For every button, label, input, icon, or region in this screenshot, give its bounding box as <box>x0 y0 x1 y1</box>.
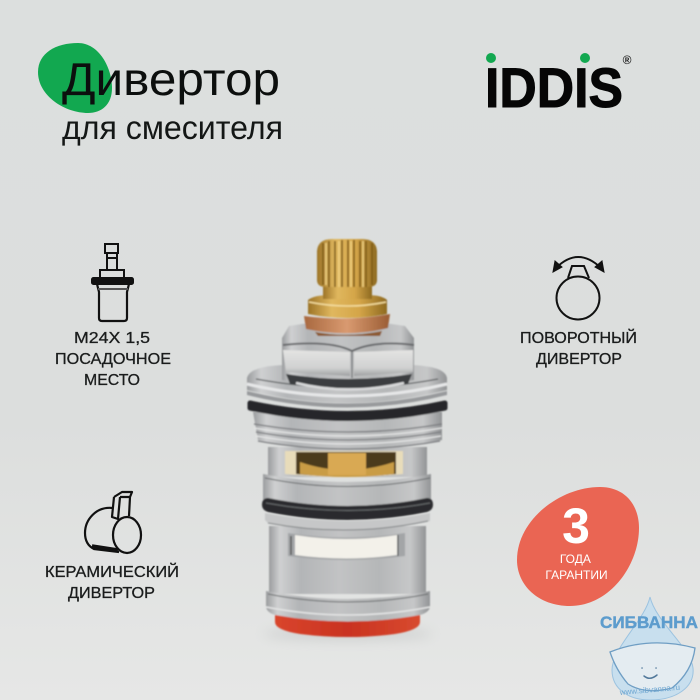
label: rotary diverter <box>520 328 637 368</box>
icon: ceramic disc <box>85 492 141 553</box>
watermark drop <box>612 597 693 700</box>
feature: ceramic diverter <box>45 492 179 602</box>
warranty number: 3 <box>562 498 590 554</box>
warranty badge <box>517 487 639 606</box>
logo dot right <box>580 53 590 63</box>
watermark face <box>642 668 657 678</box>
watermark url: www.sibvanna.ru <box>618 683 680 697</box>
feature: rotary diverter <box>520 257 637 368</box>
contact shadow <box>263 628 433 640</box>
title: Дивертор <box>62 53 280 105</box>
brand logo: IDDIS <box>485 53 632 119</box>
threaded section <box>253 412 442 450</box>
watermark: Sibvanna logo <box>600 597 698 700</box>
copper washer <box>304 314 390 333</box>
red base seal <box>275 614 420 637</box>
upper o-ring <box>250 403 445 418</box>
upper body <box>268 447 427 477</box>
logo wordmark: IDDIS <box>485 56 623 119</box>
label: seat size: ПОСАДОЧНОЕ <box>55 351 171 368</box>
hex nut <box>282 321 414 387</box>
warranty text: ГАРАНТИИ <box>545 568 608 582</box>
label: seat size <box>55 330 171 389</box>
warranty text: ГОДА <box>560 552 591 566</box>
watermark bathtub <box>610 643 695 691</box>
badge blob <box>517 487 639 606</box>
green blob <box>38 43 112 113</box>
flange <box>247 365 447 403</box>
label: ceramic diverter <box>45 562 179 602</box>
product photo: diverter cartridge <box>247 239 447 640</box>
registered mark: ® <box>623 53 632 67</box>
watermark name: СИБВАННА <box>600 614 698 632</box>
lower body <box>269 526 426 594</box>
lower ring collar <box>265 513 430 530</box>
logo dot left <box>486 53 496 63</box>
brass window <box>285 451 403 477</box>
ceramic window <box>288 533 405 560</box>
middle ring <box>263 474 431 509</box>
label: rotary diverter: ДИВЕРТОР <box>536 351 622 368</box>
feature: seat size <box>55 244 171 389</box>
label: seat size: МЕСТО <box>84 372 140 389</box>
label: ceramic diverter: ДИВЕРТОР <box>68 585 155 602</box>
icon: rotary knob <box>553 257 604 320</box>
brass collar <box>308 295 387 318</box>
lower o-ring <box>262 498 433 520</box>
bottom ring <box>266 591 430 622</box>
icon: cartridge <box>92 244 133 321</box>
label: seat size: М24Х 1,5 <box>74 330 150 347</box>
heading block <box>38 43 283 146</box>
label: ceramic diverter: КЕРАМИЧЕСКИЙ <box>45 562 179 581</box>
splined stem <box>317 239 377 287</box>
label: rotary diverter: ПОВОРОТНЫЙ <box>520 328 637 347</box>
brass neck <box>323 284 372 299</box>
subtitle: для смесителя <box>62 109 283 146</box>
